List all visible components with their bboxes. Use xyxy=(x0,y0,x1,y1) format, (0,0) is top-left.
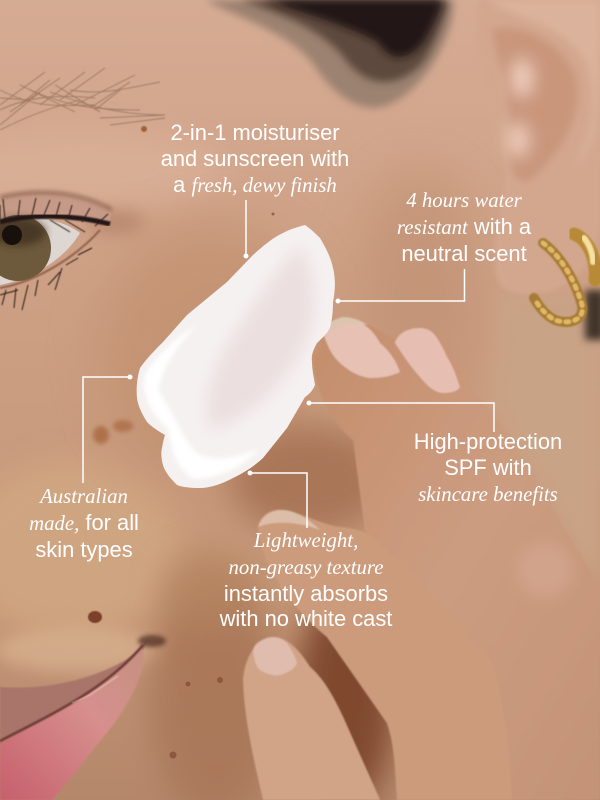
callout: Australian made: Australian xyxy=(40,485,128,508)
callout: Australian made: made, for all xyxy=(29,510,139,535)
sunscreen swatch xyxy=(137,225,335,488)
callout: Australian made xyxy=(29,485,139,562)
callout: water resistant: 4 hours water xyxy=(406,189,522,212)
callout: water resistant xyxy=(397,189,532,266)
lips xyxy=(0,635,166,800)
callout: water resistant: neutral scent xyxy=(401,241,527,266)
callout: moisturiser: 2-in-1 moisturiser xyxy=(170,120,340,145)
line: water resistant xyxy=(338,269,464,301)
callout: high protection: SPF with xyxy=(444,455,532,480)
callout: lightweight texture: Lightweight, xyxy=(254,529,358,552)
ear and neck xyxy=(476,0,600,590)
callout: lightweight texture: instantly absorbs xyxy=(224,581,388,606)
callout: moisturiser xyxy=(161,120,349,197)
freckles and moles xyxy=(88,126,274,758)
callout: lightweight texture xyxy=(220,529,392,631)
callout: high protection: skincare benefits xyxy=(418,483,558,506)
hair xyxy=(205,0,454,108)
earrings xyxy=(534,234,595,322)
callout: moisturiser: and sunscreen with xyxy=(161,146,349,171)
fingers xyxy=(243,317,600,800)
callout: high protection xyxy=(414,429,562,506)
callout: lightweight texture: non-greasy texture xyxy=(229,556,383,579)
eyebrow xyxy=(0,68,165,130)
callout: high protection: High-protection xyxy=(414,429,562,454)
line: lightweight xyxy=(250,473,307,528)
face shading xyxy=(0,130,480,800)
line: Australian made xyxy=(83,377,130,483)
line: high protection xyxy=(309,403,494,432)
line: moisturiser xyxy=(245,200,247,256)
callout: lightweight texture: with no white cast xyxy=(220,606,392,631)
callout: Australian made: skin types xyxy=(35,537,133,562)
eye xyxy=(0,192,145,310)
callout: water resistant: resistant with a xyxy=(397,214,531,239)
callout: moisturiser: a fresh, dewy finish xyxy=(173,172,337,197)
